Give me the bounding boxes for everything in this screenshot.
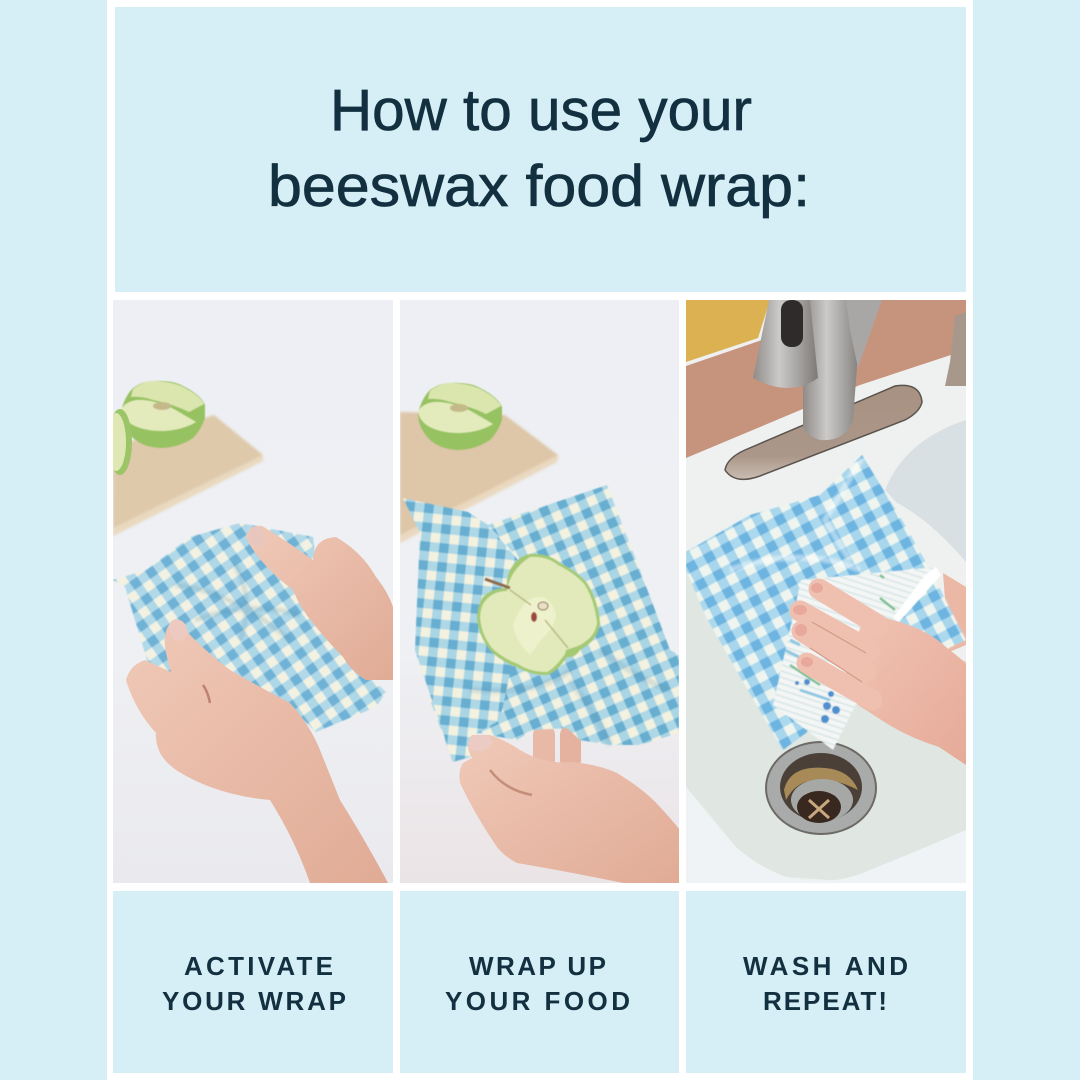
hand: lower [126,616,388,883]
panel: photo step 2 [400,300,680,885]
left side band [0,0,107,1080]
counter backsplash [686,300,966,458]
panel: caption 1: ACTIVATE [184,951,333,981]
icon: apple half background [418,383,502,450]
panel: caption 2: WRAP UP [469,951,606,981]
panel: caption 1 [113,891,393,1073]
panel: caption 1: YOUR WRAP [162,986,346,1016]
wall [686,300,770,362]
panel: caption 2 [400,891,679,1073]
fingers behind wrap [533,728,581,763]
panel: caption 3: WASH AND [743,951,908,981]
title: beeswax food wrap: [268,154,810,219]
icon: faucet [725,300,966,479]
hand [793,583,966,765]
cloth [773,567,941,750]
panel: header [115,7,966,292]
title: How to use your [330,78,752,143]
hand: upper [246,524,393,680]
panel: caption 2: YOUR FOOD [445,986,630,1016]
wrap [403,485,679,762]
title [268,78,810,219]
icon: drain [765,741,877,835]
skin behind wrap [943,573,966,652]
icon: apple halves [106,381,205,475]
panel: caption 3: REPEAT! [763,986,887,1016]
right side band [973,0,1080,1080]
hand [459,733,680,885]
panel: photo step 1 [106,300,393,883]
panel: caption 3 [686,891,966,1073]
wrap [113,523,386,732]
sink basin [885,420,966,562]
icon: apple half [477,554,600,675]
cutting board [113,415,263,536]
panel: photo step 3 [686,300,966,883]
cutting board [400,412,558,543]
wrap [686,455,966,750]
